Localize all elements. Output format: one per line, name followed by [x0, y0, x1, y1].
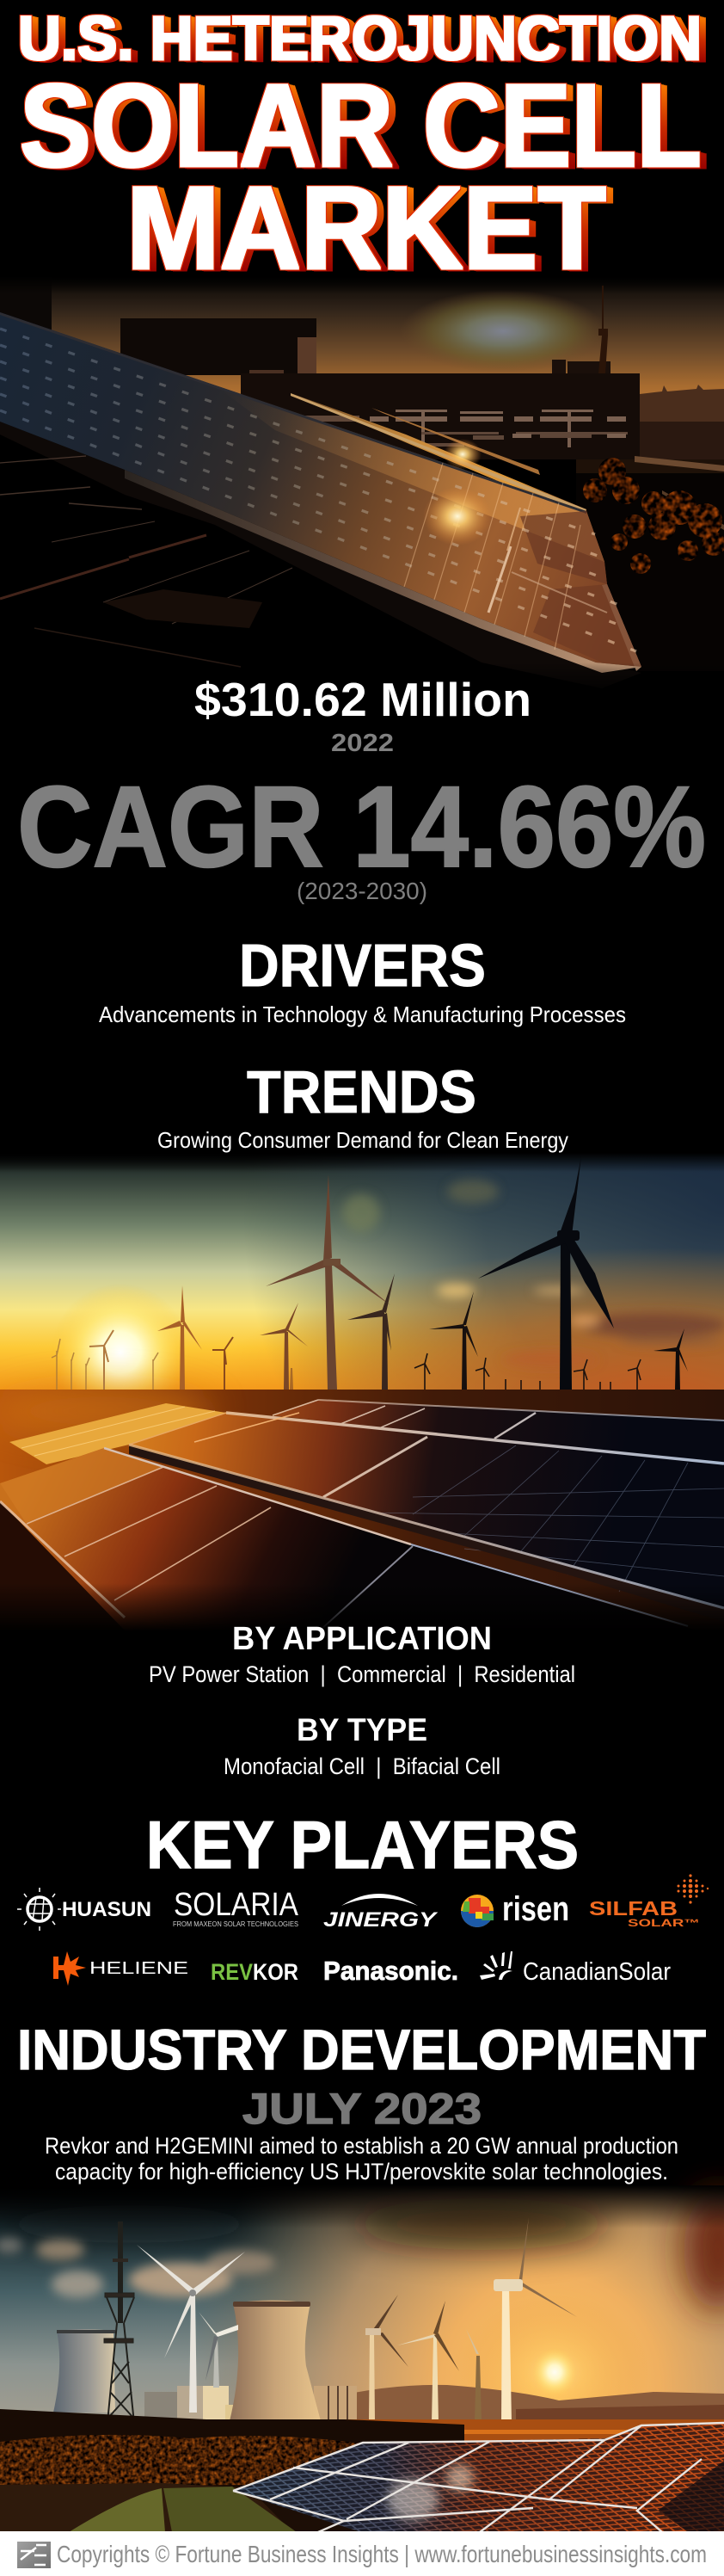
title: U.S. HETEROJUNCTION: [18, 5, 702, 73]
wind turbine: dark mid: [429, 1291, 478, 1390]
solar panels: small rear panels: [291, 393, 586, 516]
ground: [0, 1390, 724, 1630]
icon: Risen multicolour globe: [461, 1895, 494, 1927]
segment: by type: Monofacial Cell | Bifacial Cell: [224, 1753, 500, 1779]
logo: Solaria: SOLARIA: [174, 1887, 299, 1923]
logo: Heliene: HELIENE: [89, 1959, 188, 1978]
bottom fade: [0, 1583, 724, 1631]
wind turbine: small group right: [414, 1353, 641, 1390]
wind turbine: white centre-left: [137, 2245, 245, 2413]
logo: Revkor: REVKOR: [211, 1959, 298, 1985]
development text: capacity for high-efficiency US HJT/perovskite solar technologies.: [55, 2159, 668, 2185]
building: long block with windows: [241, 360, 640, 459]
sky: [0, 1153, 724, 1390]
title: [18, 5, 702, 294]
logo: Solaria: FROM MAXEON SOLAR TECHNOLOGIES: [173, 1920, 298, 1928]
wind turbine: E: [397, 2301, 459, 2423]
icon: antenna tower: [598, 286, 608, 373]
drivers: DRIVERS: [239, 932, 486, 999]
cell grid: [0, 329, 636, 651]
development text: [45, 2133, 678, 2185]
logo: Heliene: [53, 1951, 188, 1986]
wind turbine: D: [365, 2295, 408, 2420]
segment: by application: BY APPLICATION: [232, 1621, 492, 1657]
foliage: [576, 456, 724, 671]
sun: [52, 1284, 189, 1421]
solar panels: far left bright row: [9, 1403, 226, 1464]
cooling tower: left: [53, 2329, 115, 2413]
solar panels: back row: [273, 1400, 724, 1464]
clouds: [342, 1180, 724, 1367]
building: left block: [120, 318, 316, 380]
tower: lattice mast: [104, 2222, 135, 2431]
segment: by application: PV Power Station | Commercial | Residential: [149, 1661, 575, 1687]
solar panels: beam between rows: [129, 1445, 724, 1622]
hills: [318, 2385, 724, 2435]
logo: Canadian Solar: [480, 1951, 671, 1986]
logo: Jinergy: [323, 1894, 438, 1932]
wind turbine: C: [494, 2217, 577, 2423]
ground and treeline: [0, 2409, 724, 2532]
segment: by application: [149, 1621, 575, 1687]
wind turbine: sun side: [89, 1330, 114, 1390]
segment: by type: [224, 1712, 500, 1779]
logo: Fortune Business Insights: [17, 2542, 51, 2568]
photo: rooftop solar panels at sunset: [0, 276, 724, 697]
wind turbine: centre-left: [260, 1303, 308, 1390]
logo: Silfab: SILFAB: [589, 1897, 678, 1920]
sky: [52, 276, 724, 414]
photo: wind turbines and solar field at sunset: [0, 1153, 724, 1631]
drivers: Advancements in Technology & Manufacturing Processes: [99, 1001, 626, 1027]
wind turbine: behind tower: [199, 2312, 238, 2388]
solar panels: front row: [0, 1448, 696, 1630]
trends: [157, 1058, 568, 1153]
wind turbines: distant: [52, 1339, 158, 1390]
trends: TRENDS: [247, 1058, 476, 1125]
footer: [0, 2531, 724, 2576]
heading: key players: KEY PLAYERS: [146, 1807, 579, 1883]
sky: [0, 2185, 724, 2435]
wind turbine: right of centre: [347, 1273, 395, 1390]
sun: [532, 2348, 577, 2396]
reflections on lower rooftop: [0, 456, 292, 667]
market value: $310.62 Million: [194, 673, 531, 726]
trends: Growing Consumer Demand for Clean Energy: [157, 1127, 568, 1153]
wind turbine: F: [466, 2329, 482, 2423]
grass path: [0, 2483, 297, 2532]
logo: Canadian Solar: CanadianSolar: [523, 1958, 671, 1986]
date: JULY 2023: [242, 2085, 482, 2133]
segment: by type: BY TYPE: [297, 1712, 427, 1747]
wind turbine: small orange: [212, 1337, 233, 1390]
wind turbines: right group: [365, 2217, 577, 2423]
icon: Canadian Solar rays: [480, 1951, 512, 1980]
panel frames: [233, 2423, 724, 2532]
logo: Silfab: [589, 1874, 709, 1929]
plant buildings: [144, 2386, 357, 2425]
distant skyline: [640, 385, 724, 482]
icon: Heliene burst H: [53, 1951, 86, 1986]
logo: Panasonic: Panasonic.: [323, 1956, 458, 1986]
logo: Jinergy: JINERGY: [323, 1908, 438, 1932]
drivers: [99, 932, 626, 1027]
market value: 2022: [331, 730, 394, 757]
logo: Huasun: [17, 1888, 151, 1931]
cooling tower: right: [230, 2301, 321, 2421]
logo: Huasun: HUASUN: [62, 1898, 151, 1921]
solar panels: middle row: [129, 1413, 724, 1608]
CAGR: (2023-2030): [297, 878, 427, 904]
icon: Silfab dots: [678, 1874, 709, 1904]
solar panels: [233, 2423, 724, 2532]
solar panels: main array: [0, 312, 641, 688]
wind turbine: large foreground: [478, 1156, 614, 1390]
photo: power plant, turbines and solar panels: [0, 2185, 724, 2532]
wind turbine: mid-left: [157, 1285, 202, 1390]
clouds: [0, 2238, 275, 2298]
icon: Huasun globe: [17, 1888, 61, 1931]
logo: Silfab: SOLAR™: [628, 1917, 700, 1929]
wind turbine: right edge: [653, 1328, 688, 1390]
logo: Risen: risen: [502, 1890, 569, 1928]
market value: [194, 673, 531, 757]
sun glare: [423, 487, 492, 545]
logo: Risen: [461, 1890, 569, 1928]
wind turbine: tall centre: [266, 1174, 390, 1390]
title: MARKET: [126, 163, 606, 294]
